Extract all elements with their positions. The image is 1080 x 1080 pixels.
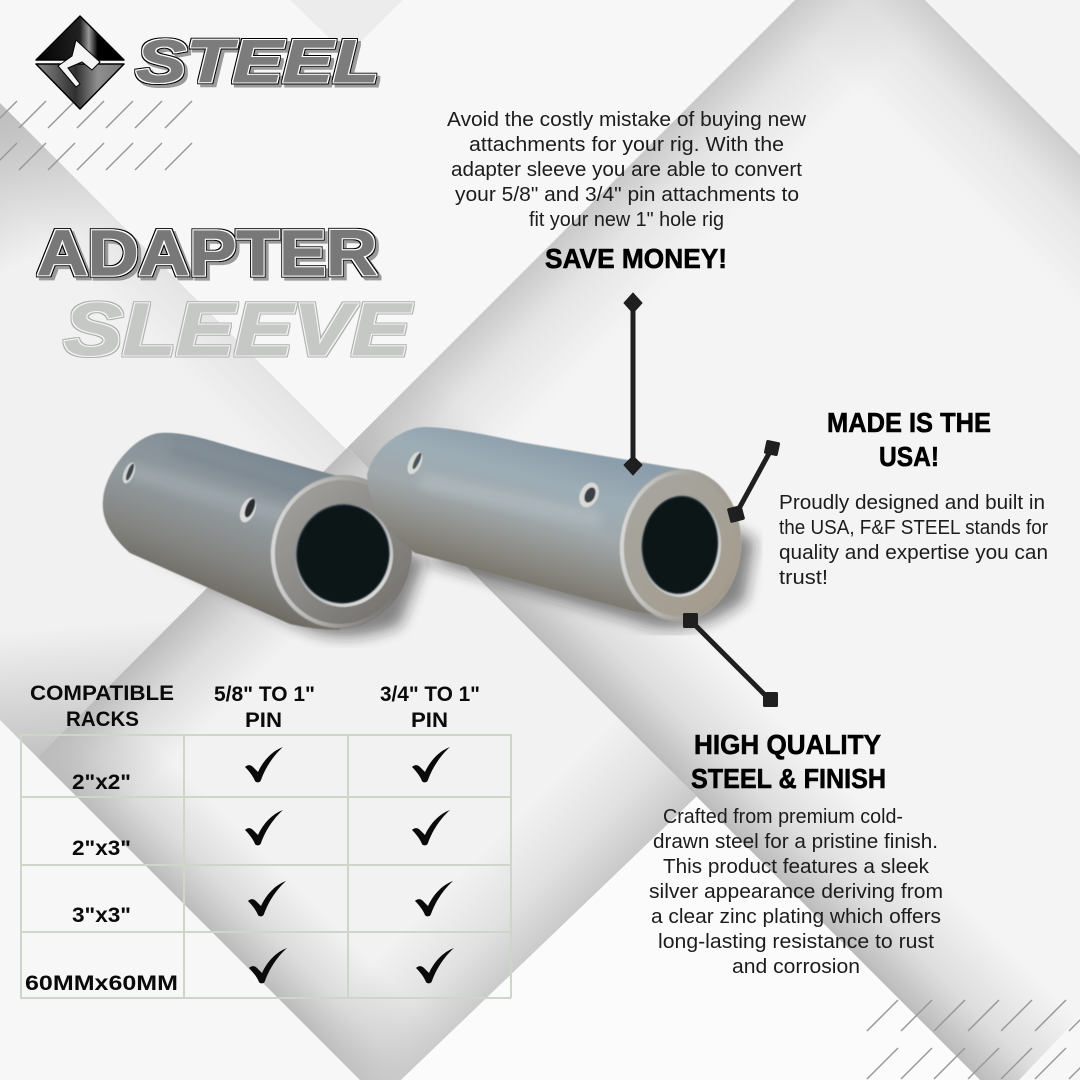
table check marks — [245, 747, 454, 983]
logo wordmark: STEEL — [136, 28, 379, 95]
text block: high quality description: long-lasting resistance to rust — [658, 931, 934, 953]
text block: made in the USA description: the USA, F&F STEEL stands for — [779, 517, 1048, 539]
table column headers: PIN — [245, 709, 282, 732]
text block: made in the USA description: quality and expertise you can — [779, 542, 1048, 564]
table row labels: 2"x3" — [72, 837, 131, 860]
icon: diamond logo mark — [36, 16, 124, 109]
table row labels: 2"x2" — [72, 771, 131, 794]
heading: made in the USA: MADE IS THE — [827, 407, 991, 438]
text block: save money description: attachments for your rig. With the — [469, 134, 784, 156]
text block: save money description: Avoid the costly mistake of buying new — [447, 109, 807, 131]
table column headers: RACKS — [66, 708, 139, 731]
photo: right adapter sleeve — [367, 427, 755, 629]
table row labels: 60MMx60MM — [25, 972, 178, 995]
table column headers: 3/4" TO 1" — [380, 683, 480, 706]
table column headers: 5/8" TO 1" — [214, 683, 315, 706]
table grid — [20, 735, 512, 998]
text block: high quality description: a clear zinc plating which offers — [651, 906, 941, 928]
arrow: save money connector — [624, 293, 642, 475]
text block: made in the USA description: trust! — [779, 567, 828, 589]
table column headers — [30, 682, 480, 732]
heading: high quality steel and finish: STEEL & FINISH — [691, 763, 886, 794]
table column headers: COMPATIBLE — [30, 682, 174, 705]
heading: made in the USA — [827, 407, 991, 472]
decorative hatch lines bottom-right — [867, 1000, 1080, 1079]
text block: made in the USA description: Proudly designed and built in — [779, 492, 1045, 514]
table column headers: PIN — [411, 709, 448, 732]
photo: left adapter sleeve — [103, 433, 425, 638]
text block: save money description: your 5/8" and 3/4" pin attachments to — [455, 184, 799, 206]
heading: high quality steel and finish: HIGH QUALITY — [694, 729, 881, 760]
text block: high quality description — [649, 806, 943, 978]
title: Sleeve: SLEEVE — [64, 288, 413, 371]
table row labels — [25, 771, 178, 995]
text block: high quality description: and corrosion — [732, 956, 860, 978]
heading: high quality steel and finish — [691, 729, 886, 794]
table row labels: 3"x3" — [72, 904, 131, 927]
compatibility table — [20, 682, 512, 998]
text block: save money description: fit your new 1" hole rig — [529, 209, 724, 231]
text block: high quality description: Crafted from premium cold- — [663, 806, 903, 828]
arrow: made in USA connector — [727, 440, 780, 523]
decorative hatch lines top-left — [0, 101, 192, 170]
text block: high quality description: drawn steel for a pristine finish. — [653, 831, 938, 853]
text block: save money description: adapter sleeve you are able to convert — [451, 159, 802, 181]
arrow: high quality connector — [683, 613, 778, 707]
title: Adapter: ADAPTER — [37, 217, 377, 289]
heading: save money: SAVE MONEY! — [545, 243, 727, 274]
text block: made in the USA description — [779, 492, 1048, 589]
text block: high quality description: silver appearance deriving from — [649, 881, 943, 903]
text block: high quality description: This product features a sleek — [663, 856, 930, 878]
heading: made in the USA: USA! — [879, 441, 939, 472]
logo: F&F Steel — [36, 16, 379, 109]
text block: save money description — [447, 109, 807, 231]
